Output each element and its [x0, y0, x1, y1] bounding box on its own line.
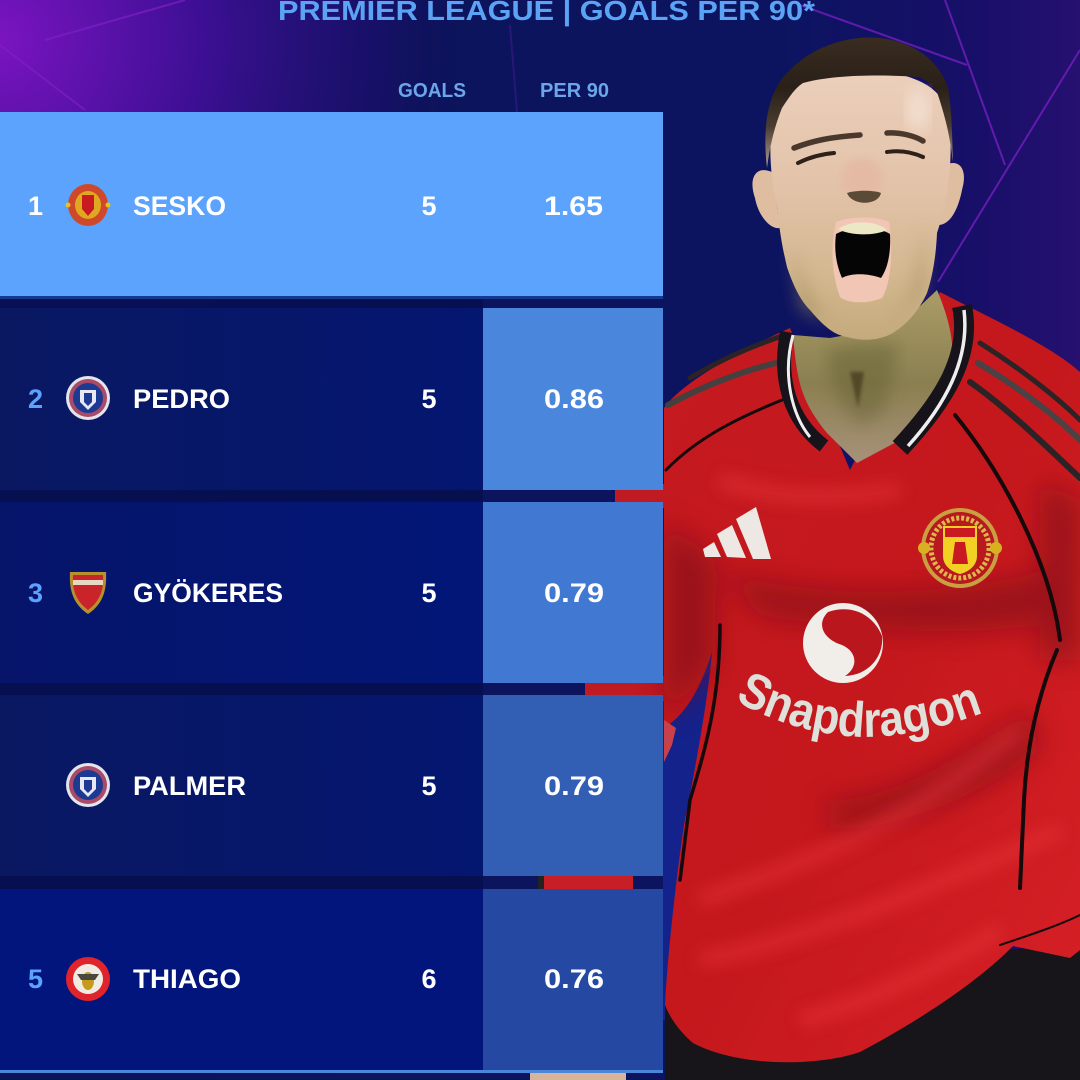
sponsor logo: [803, 603, 883, 683]
collar: [784, 306, 965, 448]
sleeve stripes: [668, 335, 1080, 478]
brows: [794, 133, 923, 148]
goals: 5: [421, 384, 437, 414]
per 90: 0.86: [544, 384, 604, 414]
rank: 1: [28, 191, 43, 221]
icon: Chelsea crest: [66, 376, 110, 420]
per 90: 0.76: [544, 964, 604, 994]
icon: Manchester United crest: [66, 184, 110, 226]
mouth: [833, 218, 891, 302]
column header: per 90: PER 90: [540, 80, 609, 102]
goals: 6: [421, 964, 437, 994]
adidas stripes: [703, 507, 771, 559]
per 90: 1.65: [544, 191, 603, 221]
goals: 5: [421, 191, 437, 221]
icon: Brentford crest: [66, 957, 110, 1001]
shirt: [664, 292, 1080, 1062]
name: THIAGO: [133, 964, 241, 994]
row 4: Palmer: [0, 695, 663, 876]
row 5: Thiago: [0, 889, 663, 1073]
head: [770, 70, 951, 340]
rank: 2: [28, 384, 43, 414]
row 3: Gyökeres: [0, 502, 663, 683]
icon: Arsenal crest: [70, 572, 106, 614]
shirt shading folds: [664, 480, 1080, 830]
icon: Chelsea crest: [66, 763, 110, 807]
row 1: Sesko: [0, 112, 663, 299]
ears: [752, 163, 964, 228]
sponsor text: Snapdragon: [739, 674, 981, 742]
name: GYÖKERES: [133, 578, 283, 608]
name: PALMER: [133, 771, 246, 801]
name: PEDRO: [133, 384, 230, 414]
rank: 5: [28, 964, 43, 994]
cheek shadows: [790, 225, 925, 325]
player arm behind table: [530, 484, 667, 1080]
row 2: Pedro: [0, 308, 663, 490]
hair: [765, 37, 953, 168]
player photo illustration: [652, 38, 1080, 1080]
name: SESKO: [133, 191, 226, 221]
nose: [841, 158, 883, 203]
eyes: [798, 151, 923, 163]
column header: goals: GOALS: [398, 80, 466, 102]
crest on shirt: [918, 508, 1002, 588]
neck: [793, 290, 952, 463]
per 90: 0.79: [544, 578, 604, 608]
rank: 3: [28, 578, 43, 608]
left arm hand detail: [664, 720, 676, 762]
goals: 5: [421, 771, 437, 801]
shirt seams: [666, 400, 1080, 945]
table row gaps background: [0, 296, 483, 889]
shorts: [665, 945, 1080, 1080]
goals: 5: [421, 578, 437, 608]
per 90: 0.79: [544, 771, 604, 801]
forehead highlight: [906, 88, 930, 132]
